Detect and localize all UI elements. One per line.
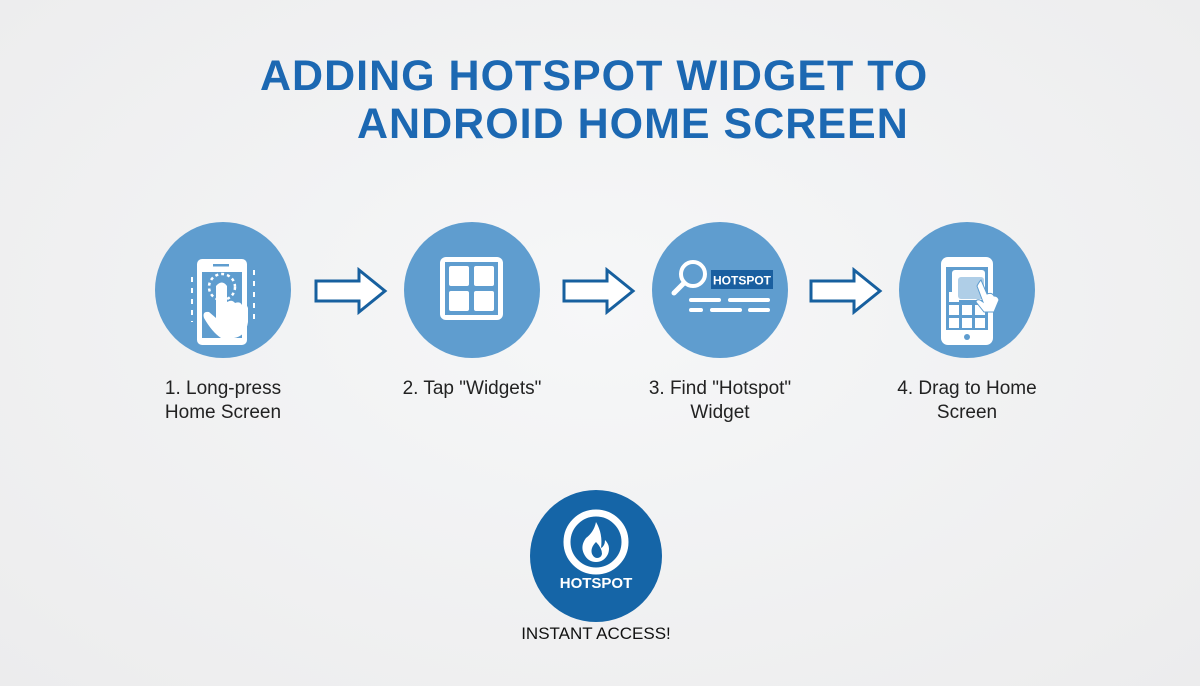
step 2 icon	[404, 222, 540, 358]
text: 1. Long-press	[165, 378, 281, 399]
text: Screen	[937, 402, 997, 423]
step labels	[165, 378, 1037, 423]
arrow 2	[562, 267, 636, 315]
text: 3. Find "Hotspot"	[649, 378, 791, 399]
hotspot widget icon	[530, 490, 662, 622]
step 3 icon	[652, 222, 788, 358]
step 1 icon	[155, 222, 291, 358]
text: ADDING HOTSPOT WIDGET TO	[260, 52, 928, 100]
step 4 icon	[899, 222, 1035, 358]
text: Widget	[690, 402, 750, 423]
instant access text: INSTANT ACCESS!	[521, 624, 671, 643]
text: Home Screen	[165, 402, 281, 423]
step 3 icon: HOTSPOT	[713, 274, 772, 288]
text: 4. Drag to Home	[897, 378, 1037, 399]
arrow 1	[314, 267, 388, 315]
text: ANDROID HOME SCREEN	[357, 100, 909, 148]
arrow 3	[810, 267, 882, 315]
title	[260, 52, 928, 148]
text: 2. Tap "Widgets"	[403, 378, 541, 399]
hotspot widget icon: HOTSPOT	[560, 575, 632, 592]
